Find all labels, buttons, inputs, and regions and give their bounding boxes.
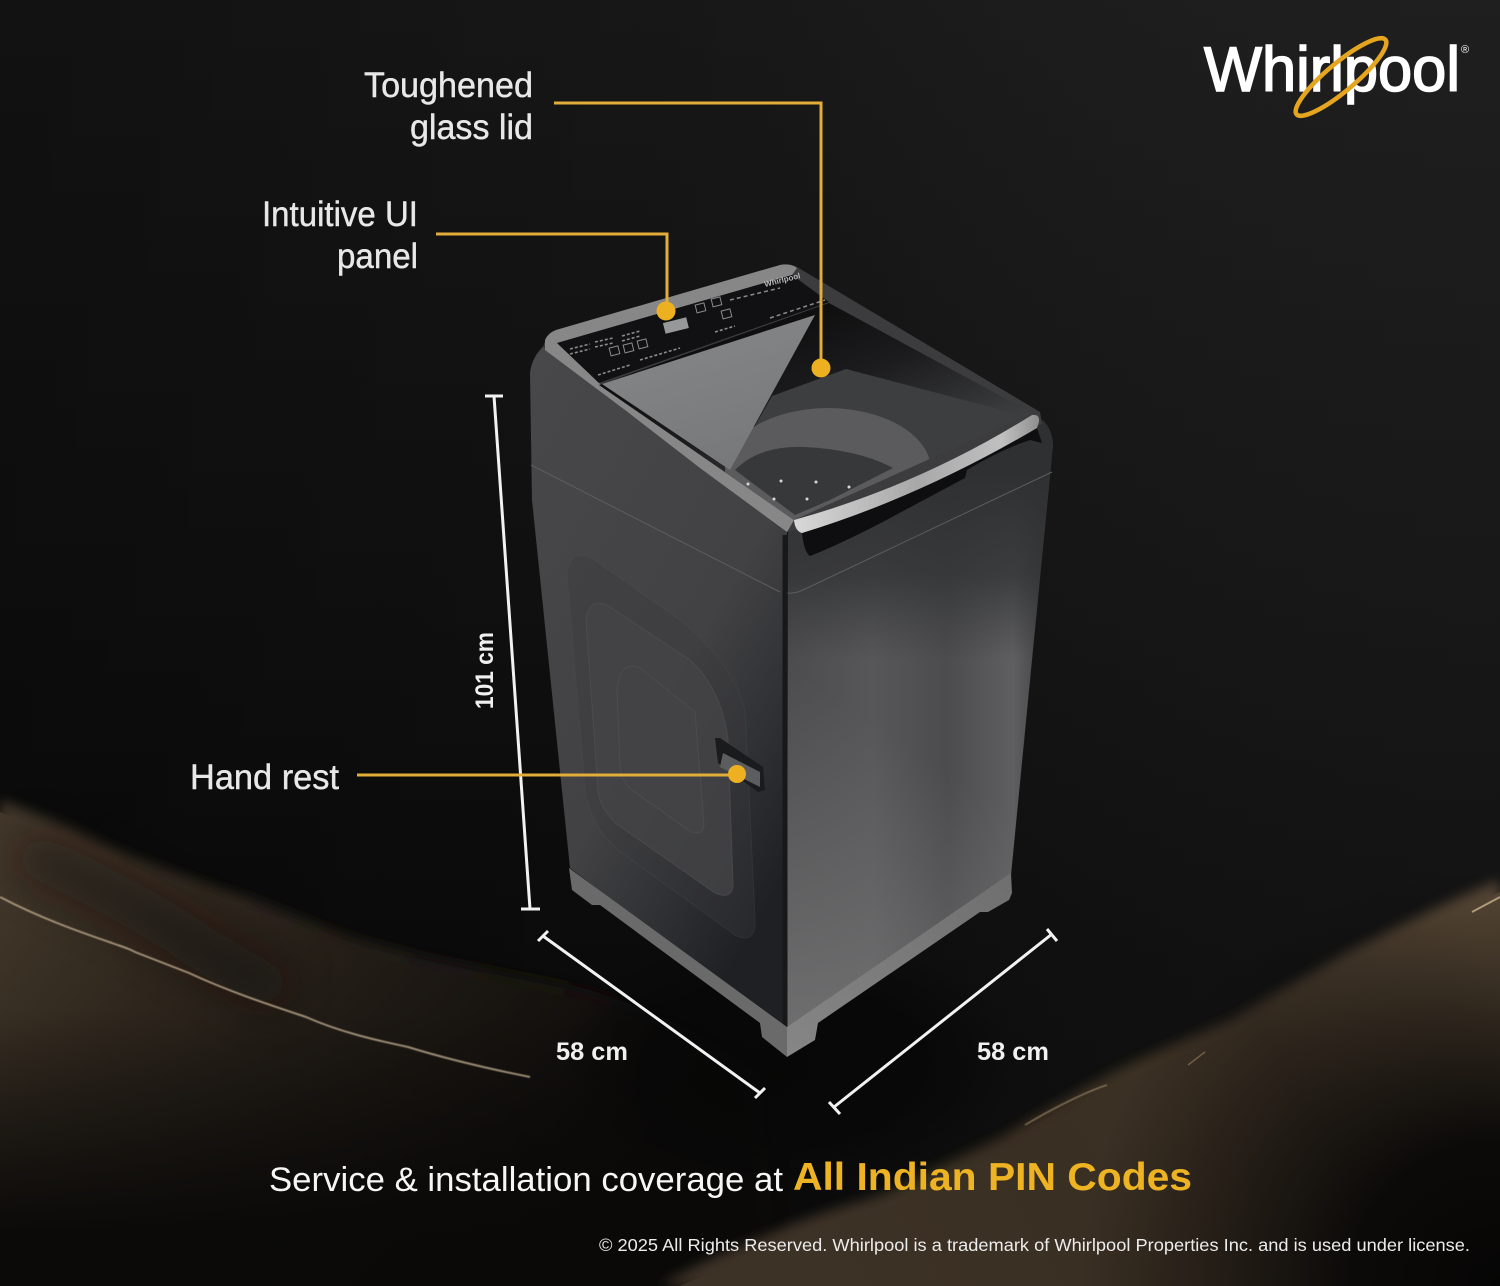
- left face door embossing: [567, 555, 755, 938]
- logo: Whirlpool: Whirlpool: [1204, 35, 1460, 105]
- dimension: left depth 58 cm: 58 cm: [556, 1038, 628, 1066]
- background dune: left: [0, 800, 790, 1286]
- grey trim strips: [545, 264, 797, 532]
- right body face: [787, 420, 1053, 1030]
- floor shadow under the washer: [560, 930, 1020, 1190]
- copyright note: © 2025 All Rights Reserved. Whirlpool is a trademark of Whirlpool Properties Inc. and is used under license.: [599, 1235, 1470, 1255]
- washing machine: [530, 264, 1053, 1057]
- callout: toughened glass lid: Toughened: [364, 66, 533, 105]
- callout: hand rest: Hand rest: [190, 758, 339, 797]
- left body face: [530, 345, 787, 1030]
- dimension: height 101 cm: [471, 396, 540, 909]
- base: [569, 868, 1012, 1057]
- hand rest: [715, 738, 765, 792]
- seam lines: [531, 465, 1052, 593]
- callout: intuitive UI panel: Intuitive UI: [262, 195, 418, 234]
- control panel: [557, 275, 829, 383]
- service coverage headline: Service & installation coverage at: [269, 1161, 784, 1199]
- drum: [725, 369, 980, 520]
- glass lid reflection: [602, 315, 815, 470]
- callout: toughened glass lid: glass lid: [410, 108, 533, 147]
- panel brand mark: Whirlpool: [763, 271, 801, 289]
- callout: hand rest: [190, 758, 746, 797]
- background dune: bottom right: [660, 860, 1500, 1286]
- top trim: [543, 264, 1042, 533]
- dimension: right width 58 cm: 58 cm: [977, 1038, 1049, 1066]
- glass lid: [599, 303, 1032, 520]
- front corner edge: [782, 535, 788, 1028]
- dimension: left depth 58 cm: [538, 931, 765, 1098]
- dimension: right width 58 cm: [829, 929, 1057, 1114]
- callout: intuitive UI panel: panel: [337, 237, 418, 276]
- control panel details: [570, 288, 825, 375]
- dimension: height 101 cm: 101 cm: [471, 632, 499, 709]
- lid recess: [802, 428, 1042, 556]
- drum holes: [746, 480, 850, 500]
- lid handle: [794, 415, 1039, 533]
- logo: Whirlpool: ®: [1461, 44, 1469, 56]
- callout: intuitive UI panel: [262, 195, 676, 320]
- callout: toughened glass lid: [364, 66, 830, 378]
- highlighted coverage text: All Indian PIN Codes: [793, 1156, 1192, 1199]
